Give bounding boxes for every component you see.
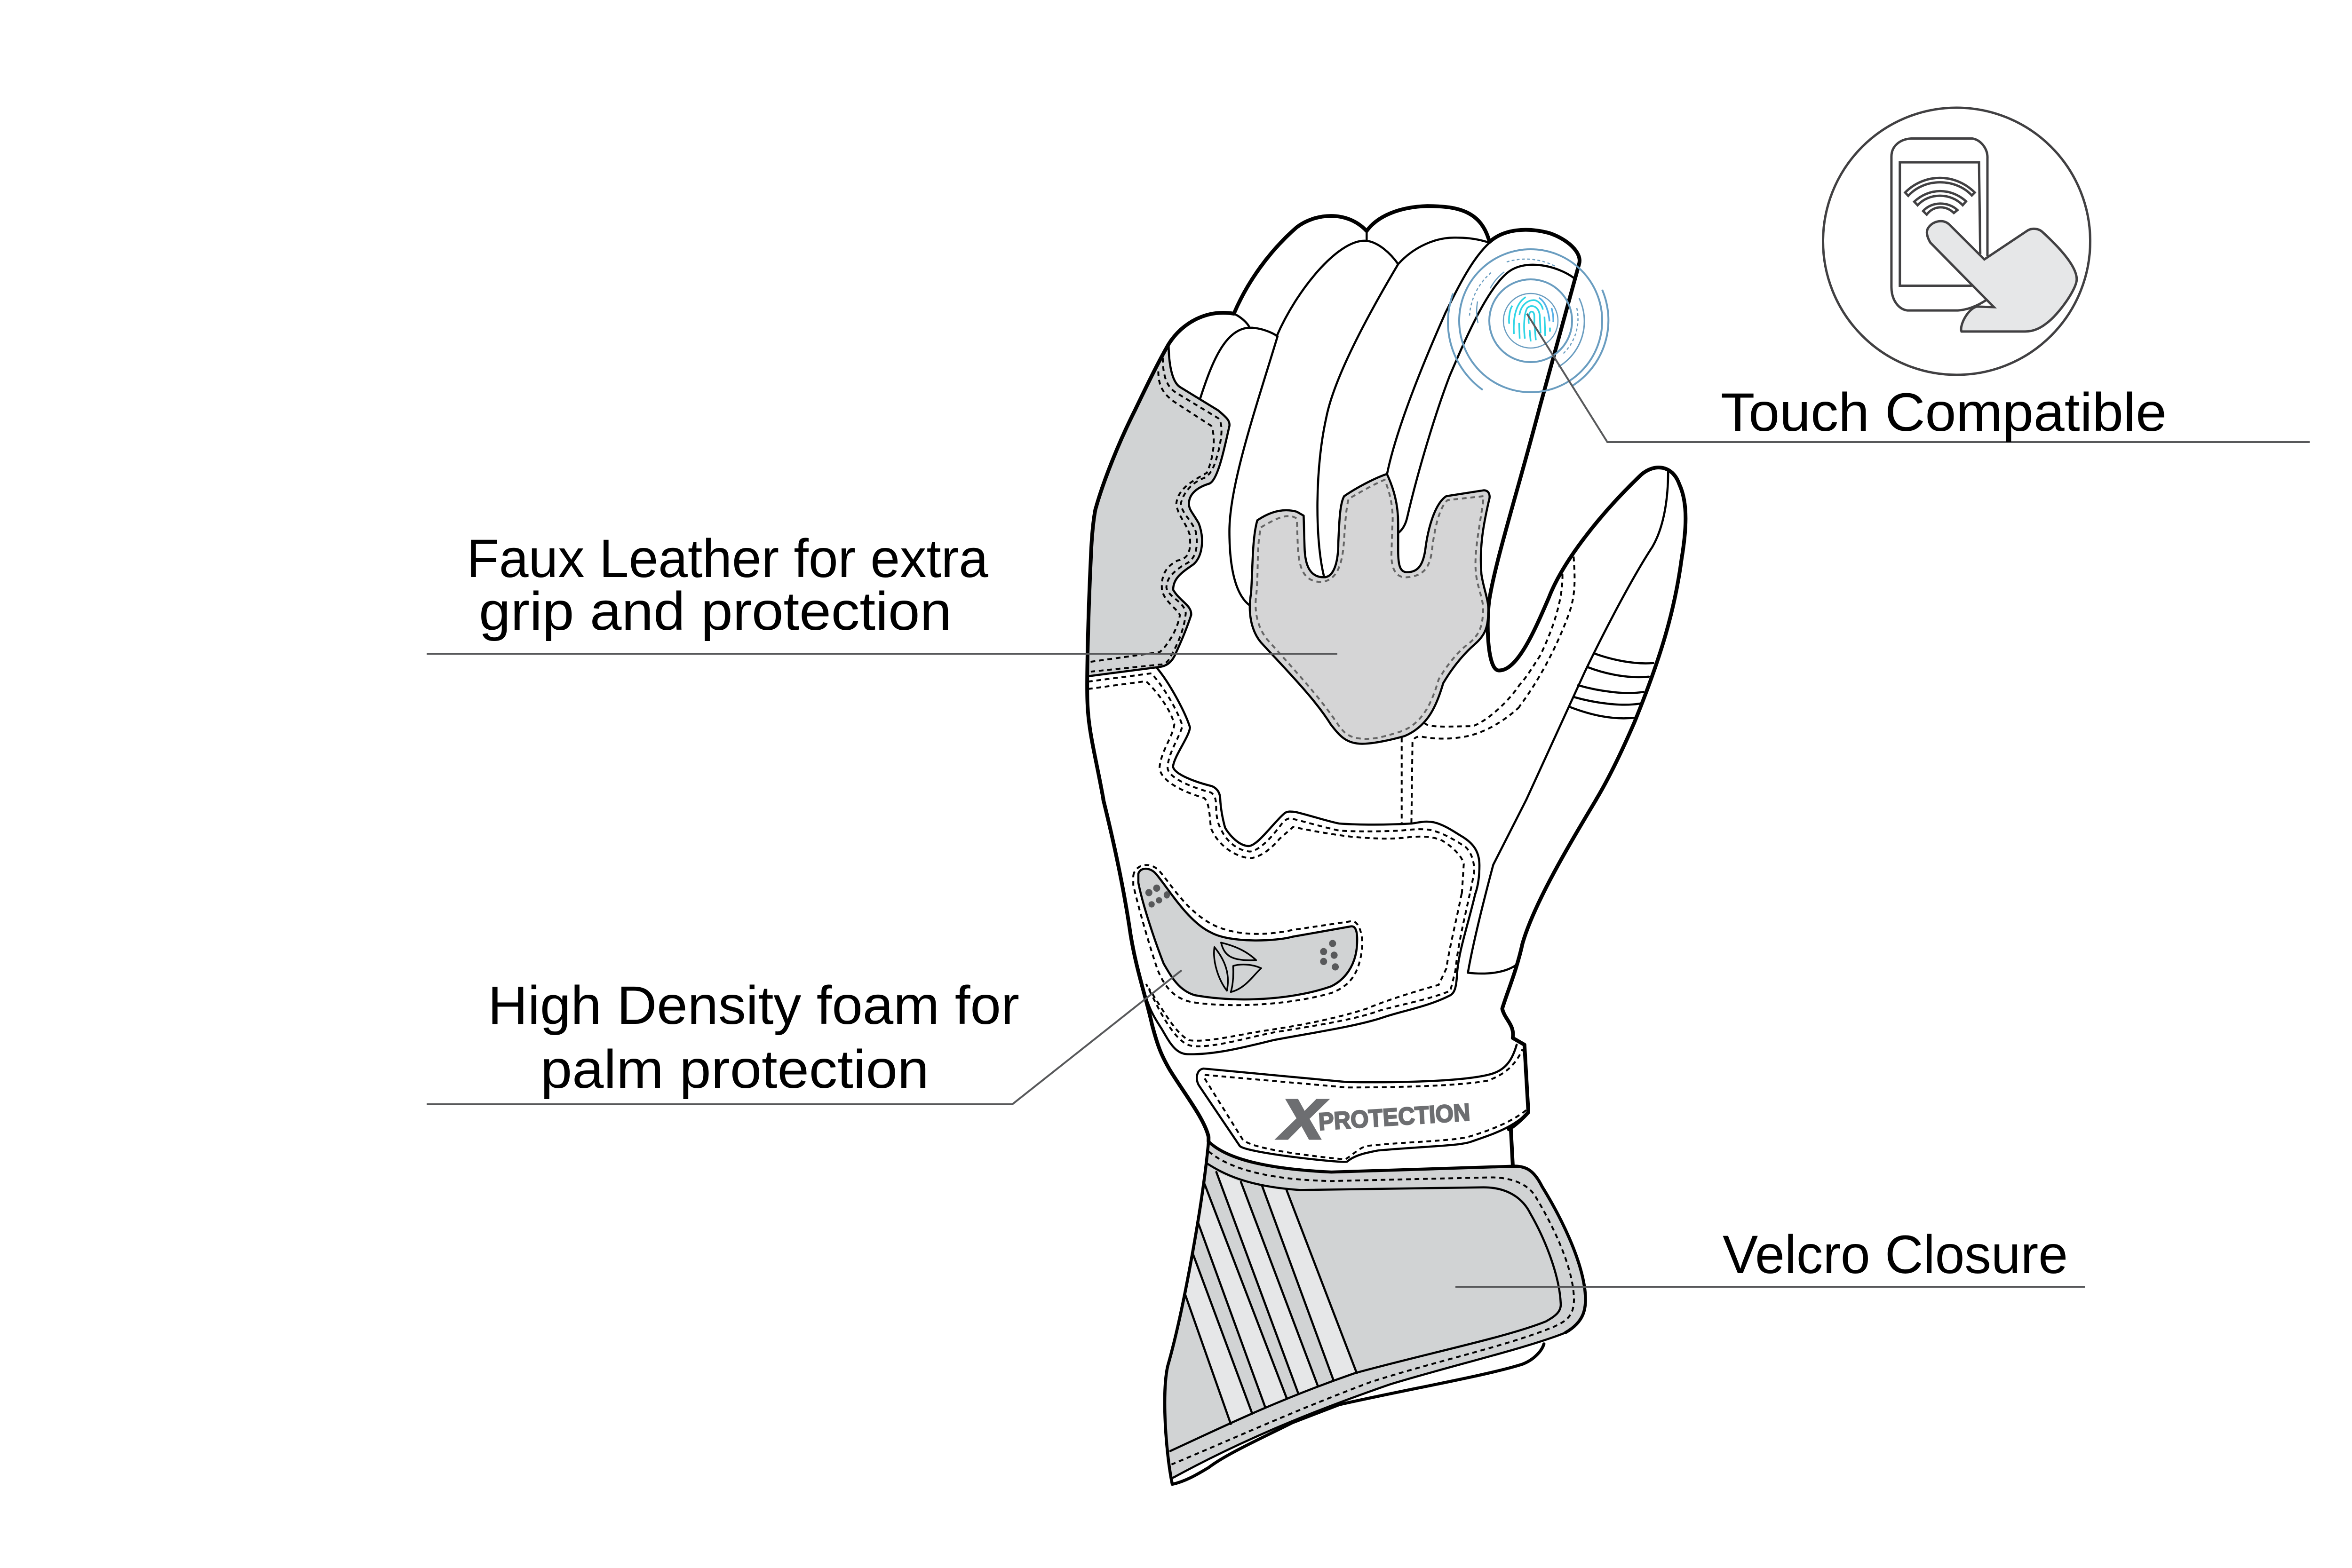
icon circle	[1823, 108, 2090, 375]
palm pad seam	[1157, 668, 1479, 894]
thumb seam	[1526, 471, 1668, 800]
pointing hand	[1927, 221, 2077, 332]
foam dots	[1145, 885, 1339, 971]
foam leaf logo	[1214, 942, 1261, 992]
label: faux leather: grip and protection	[479, 581, 952, 641]
glove lower: wrist and cuff	[1103, 800, 1596, 1484]
wrist outline right	[1502, 800, 1596, 1165]
X Protection logo: X	[1277, 1088, 1327, 1151]
label: faux leather	[467, 529, 988, 641]
wrist band panel	[1197, 1045, 1528, 1162]
glove palm seam and stitching	[1088, 668, 1519, 894]
label: touch compatible: Touch Compatible	[1721, 382, 2167, 443]
cuff light stripes	[1185, 1172, 1357, 1424]
icon: touch screen phone	[1823, 108, 2090, 375]
cuff outer edge	[1208, 1141, 1586, 1333]
wifi arcs	[1905, 178, 1975, 214]
cuff outer outline	[1165, 1141, 1544, 1484]
fingerprint lines	[1509, 297, 1553, 341]
foam stitching	[1133, 865, 1362, 1005]
glove upper: fingers and thumb	[1087, 206, 1685, 800]
palm pad second stitching	[1088, 681, 1464, 894]
phone body	[1891, 139, 1987, 310]
leader line: velcro closure	[1455, 1286, 2085, 1288]
panel: faux leather palm patch	[1250, 474, 1490, 744]
palm pad stitching lower	[1146, 894, 1470, 1046]
cuff inner panel edge	[1170, 1164, 1561, 1451]
label: velcro closure: Velcro Closure	[1723, 1225, 2068, 1285]
leader line: touch compatible	[1527, 314, 2310, 442]
vertical palm stitching	[1402, 685, 1519, 823]
glove outer outline lower	[1103, 800, 1208, 1141]
palm pad seam lower	[1146, 894, 1475, 1054]
thumb stitching	[1519, 556, 1574, 707]
finger seams	[1200, 231, 1573, 605]
palm pad stitching	[1088, 673, 1474, 894]
palm pad second stitching lower	[1149, 894, 1462, 1041]
phone screen	[1900, 162, 1980, 285]
label: faux leather: Faux Leather for extra	[467, 529, 988, 589]
second stitching on side panel	[1090, 372, 1214, 662]
label: high density foam: palm protection	[540, 1039, 929, 1100]
X Protection logo: PROTECTION	[1318, 1099, 1471, 1136]
label: high density foam	[488, 975, 1019, 1100]
stitching on side panel	[1091, 358, 1222, 672]
label: high density foam: High Density foam for	[488, 975, 1019, 1036]
panel: high density foam pad	[1138, 869, 1357, 999]
phone and hand	[1891, 139, 2077, 332]
leader line: high density foam	[427, 970, 1182, 1104]
glove illustration	[1087, 206, 1685, 1484]
panel: faux leather on little finger side	[1088, 344, 1230, 676]
concentric rings	[1448, 249, 1608, 392]
cuff stripe lines	[1185, 1172, 1357, 1424]
glove outer outline upper	[1087, 206, 1685, 800]
X Protection logo	[1277, 1088, 1471, 1151]
cuff stitching	[1171, 1151, 1574, 1465]
wrist band stitching	[1205, 1049, 1526, 1159]
leader line: faux leather	[427, 653, 1337, 655]
panel: velcro closure cuff	[1165, 1141, 1586, 1484]
thumb stripes	[1569, 653, 1653, 718]
icon: fingerprint touch rings on fingertip	[1448, 249, 1608, 392]
thumb seam lower	[1468, 800, 1526, 974]
cuff lower flap line	[1174, 1333, 1565, 1478]
palm patch stitching	[1255, 480, 1484, 739]
